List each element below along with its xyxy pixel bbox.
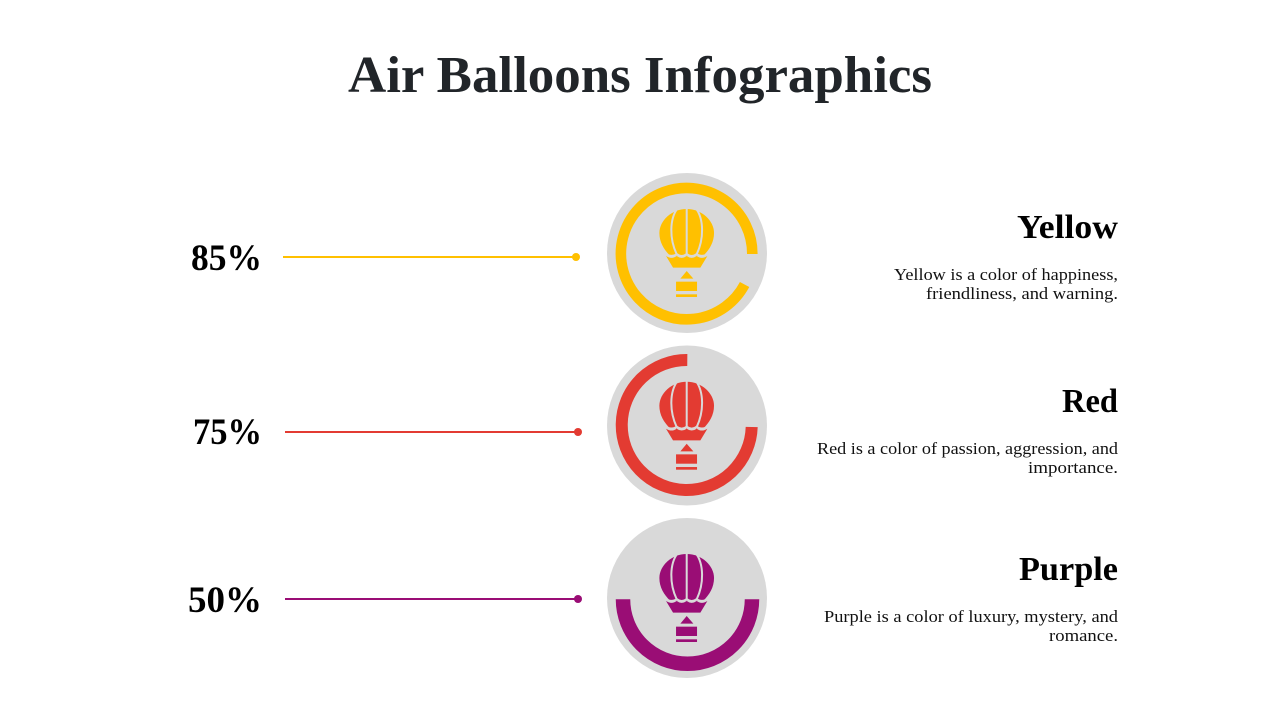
- description: Red: Red is a color of passion, aggression, and: [817, 439, 1119, 458]
- percentage: 85%: 85%: [191, 238, 262, 279]
- percentage: 75%: 75%: [193, 412, 262, 453]
- description: Purple: [824, 607, 1119, 645]
- heading: Purple: Purple: [1019, 551, 1118, 588]
- icon: purple balloon: [659, 553, 714, 642]
- connector line: red: [285, 428, 582, 436]
- description: Purple: Purple is a color of luxury, mystery, and: [824, 607, 1119, 626]
- panel: purple row: [188, 518, 1119, 678]
- heading: Yellow: Yellow: [1017, 209, 1118, 246]
- icon: red balloon: [659, 381, 714, 470]
- description: Red: [817, 439, 1119, 477]
- description: Yellow: [894, 265, 1118, 303]
- panel: yellow row: [191, 173, 1118, 333]
- percentage: 50%: 50%: [188, 580, 262, 621]
- gauge: red 75%: [607, 346, 767, 506]
- heading: Red: Red: [1062, 383, 1118, 420]
- connector line: purple: [285, 595, 582, 603]
- panel: red row: [193, 346, 1119, 506]
- connector line: yellow: [283, 253, 580, 261]
- title: Air Balloons Infographics: [348, 47, 932, 104]
- description: Yellow: Yellow is a color of happiness,: [894, 265, 1118, 284]
- description: Red: importance.: [1028, 458, 1118, 477]
- icon: yellow balloon: [659, 208, 714, 297]
- description: Yellow: friendliness, and warning.: [926, 284, 1118, 303]
- gauge: yellow 85%: [607, 173, 767, 333]
- gauge: purple 50%: [607, 518, 767, 678]
- description: Purple: romance.: [1049, 626, 1118, 645]
